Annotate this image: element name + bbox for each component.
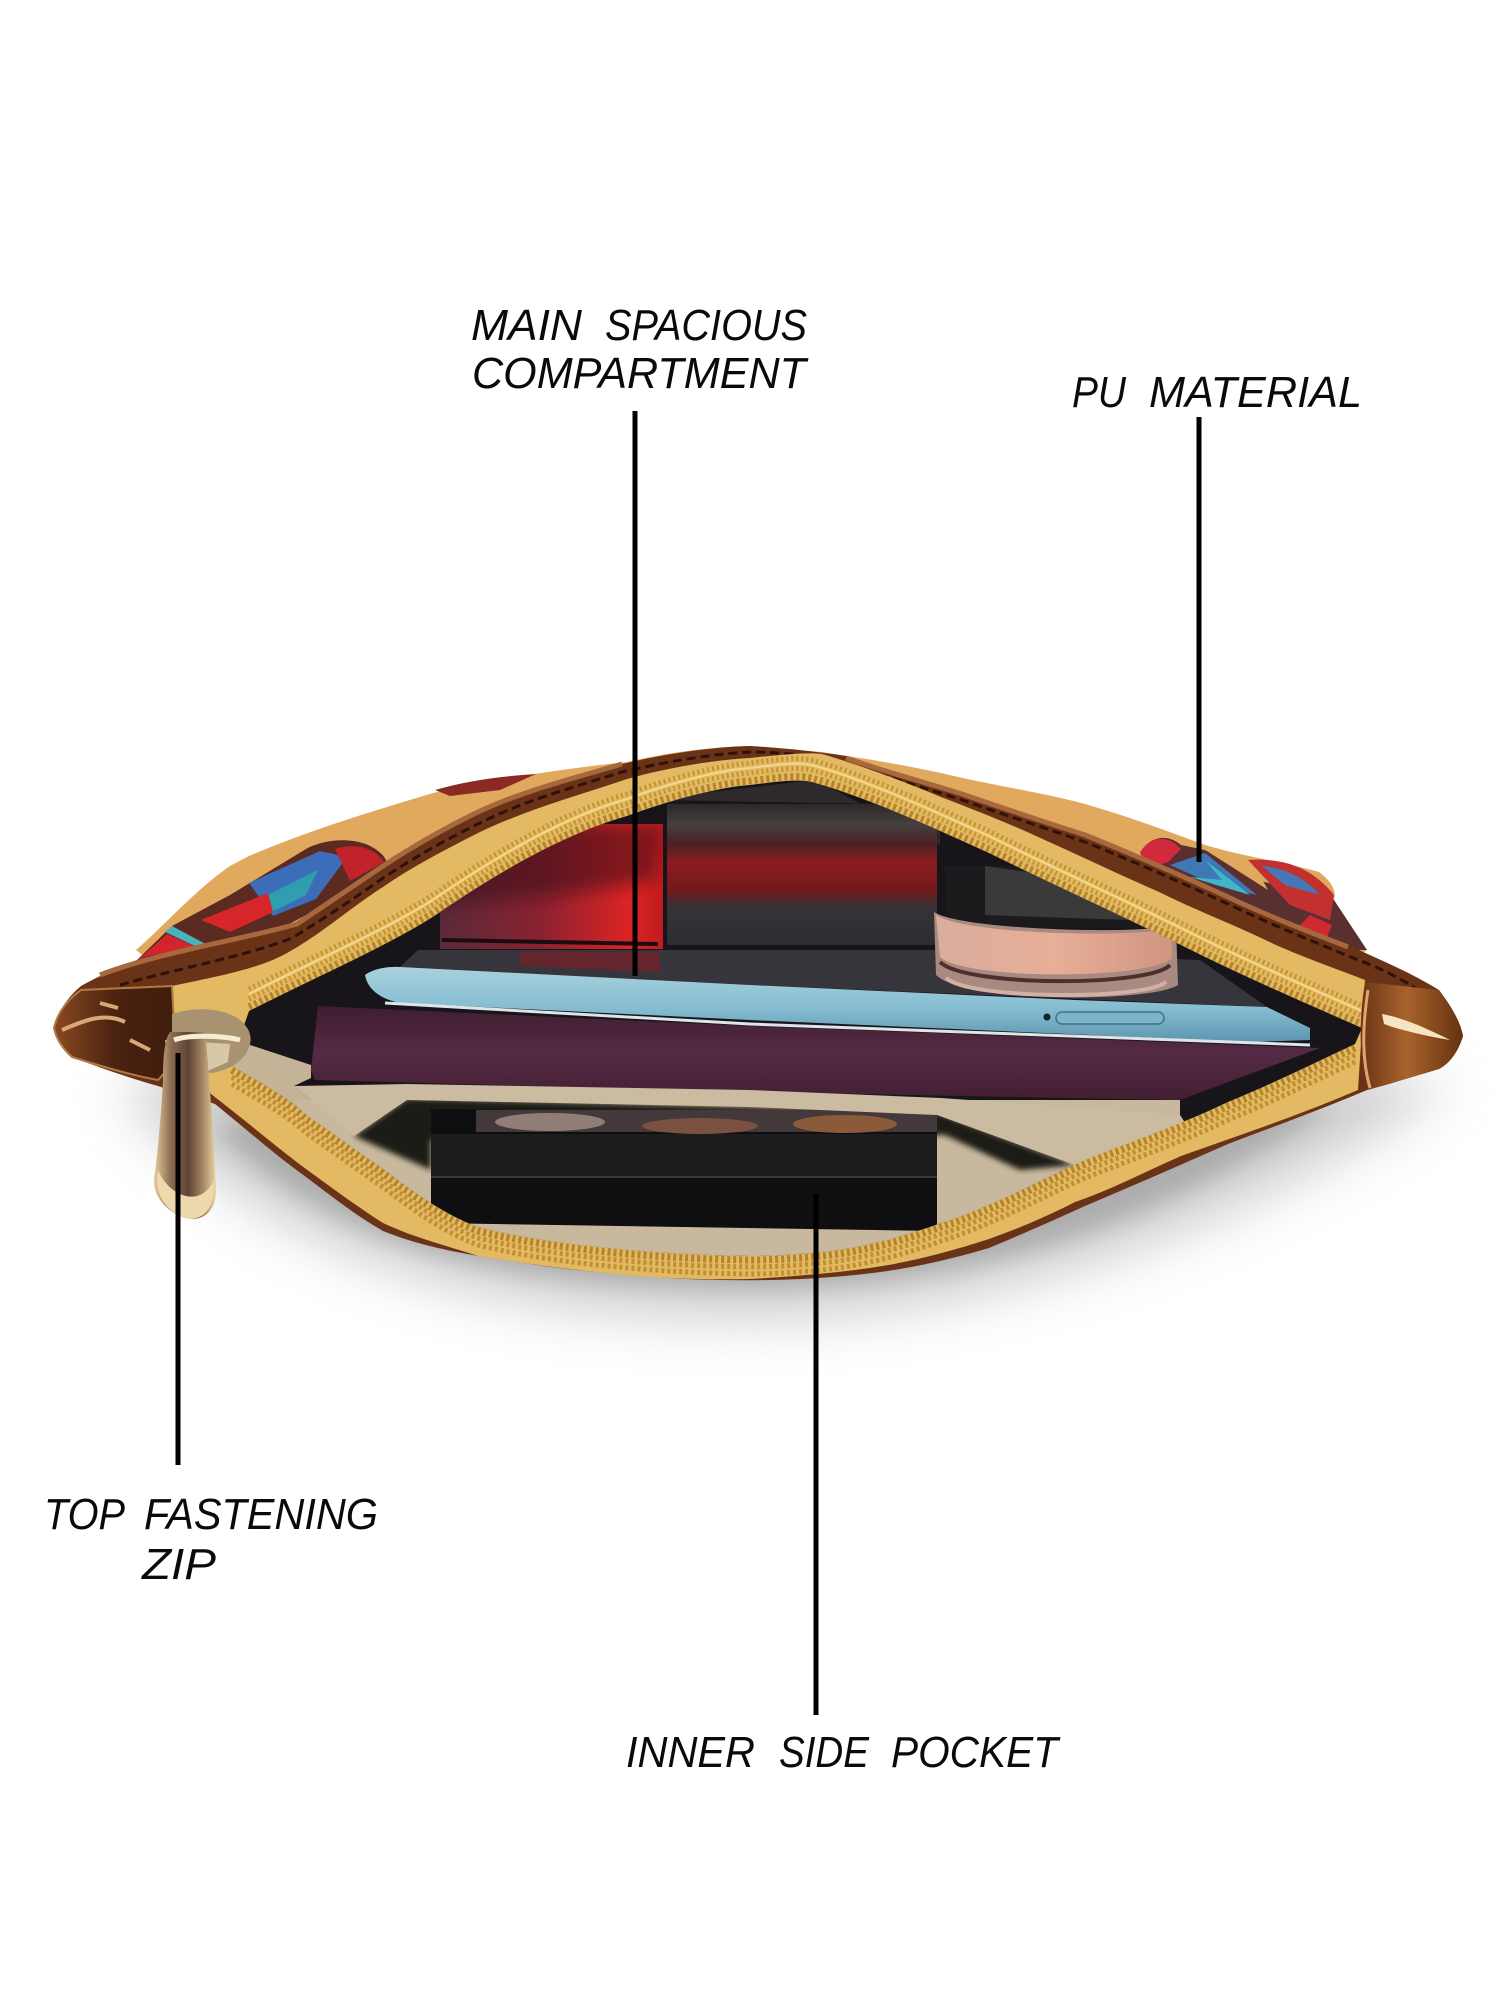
label: PU material: PU [1072,368,1126,417]
fabric motif: left [136,774,536,972]
label: top fastening zip: ZIP [141,1540,217,1589]
callout line: top fastening zip [176,1053,180,1465]
dark lining [220,770,1370,1270]
pocket flap [294,1084,1190,1165]
label: PU material: MATERIAL [1149,368,1362,417]
label: top fastening zip [44,1490,378,1589]
lower lining [298,1100,1180,1256]
dark red case [667,804,937,945]
brown patent trim [54,746,1463,1280]
label: inner side pocket: INNER [626,1728,755,1777]
illustration: open pouch [54,746,1463,1318]
right metallic end [1361,982,1463,1090]
back panel: tan fabric [136,746,1367,1000]
zipper tape [172,753,1365,1279]
zipper pull [154,1009,251,1219]
left lining [232,1045,319,1124]
label: main spacious compartment: SPACIOUS [605,301,807,350]
label: inner side pocket: SIDE [779,1728,870,1777]
left metallic end [54,986,176,1080]
label: main spacious compartment: COMPARTMENT [472,349,809,398]
reflected red on phone [520,952,660,972]
label: inner side pocket [626,1728,1061,1777]
shadow under flap [354,1098,1075,1170]
compact jar [934,866,1178,997]
fabric motif: right [1140,838,1367,950]
phone body [365,967,1310,1045]
label: inner side pocket: POCKET [891,1728,1061,1777]
phone back surface [400,950,1267,1007]
zipper teeth [230,759,1362,1274]
soft drop shadow [120,1060,1450,1318]
callout line: main compartment [632,411,638,976]
label: main spacious compartment: MAIN [471,301,582,350]
label: top fastening zip: FASTENING [144,1490,378,1539]
label: main spacious compartment [471,301,809,398]
red palette [440,824,663,949]
bag interior [232,780,1361,1256]
purple box [311,1006,1320,1100]
label: top fastening zip: TOP [44,1490,126,1539]
black eyeshadow palette [431,1109,937,1231]
callout line: PU material [1196,417,1202,862]
callout line: inner side pocket [814,1194,818,1715]
upper lining highlight [674,781,940,845]
